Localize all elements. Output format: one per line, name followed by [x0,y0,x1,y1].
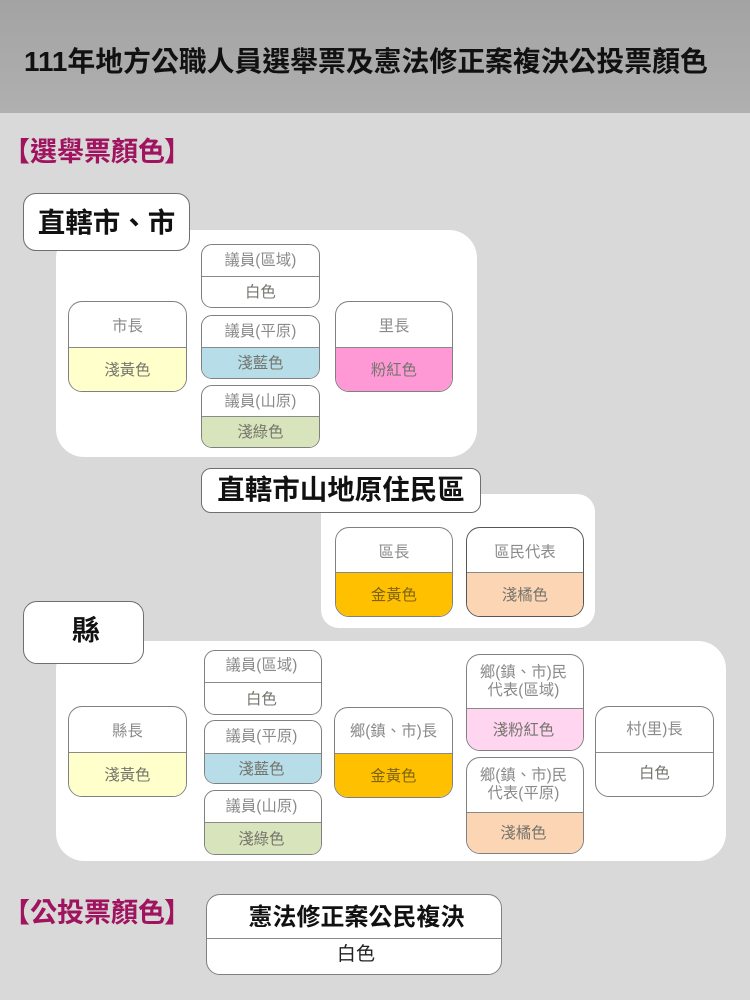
card: councilor district: 白色 [245,284,276,301]
card: village chief [595,706,714,797]
card: councilor district: 議員(區域) [224,252,296,268]
header band [0,0,750,113]
card: county magistrate: 縣長 [112,723,143,740]
card: township chief [334,707,453,798]
card: councilor mountain: 議員(山原) [224,392,296,410]
referendum name [207,895,501,939]
label: county: 縣 [72,615,100,646]
card: councilor district: 議員(區域) [226,656,297,674]
card: councilor district [201,244,320,308]
card: councilor plains [204,720,322,784]
card: mayor: 市長 [112,318,143,335]
card: township chief: 金黃色 [370,768,417,785]
label: municipalities and cities [23,193,190,251]
card: councilor district [204,650,322,715]
card: township representative district: 淺粉紅色 [493,722,554,738]
card: township representative plains: 鄉(鎮、市)民 [480,767,567,784]
card: district representative: 淺橘色 [502,587,548,604]
panel: municipalities and cities [56,230,477,457]
card: township representative plains: 淺橘色 [500,825,547,842]
card: councilor mountain: 淺綠色 [238,830,285,848]
card: constitutional amendment referendum [206,894,502,975]
card: councilor mountain [204,790,322,855]
card: councilor plains: 淺藍色 [237,355,284,372]
title: 111年地方公職人員選舉票及憲法修正案複決公投票顏色 [24,46,708,77]
card: county magistrate [68,706,187,797]
card: township representative district [466,654,584,751]
card: district representative [466,527,584,617]
card: township representative plains [466,757,584,854]
card: county magistrate: 淺黃色 [104,767,151,784]
card: district chief [335,527,453,617]
card: village chief: 村(里)長 [626,720,683,738]
referendum name: 憲法修正案公民複決 [249,904,464,930]
panel: indigenous districts [321,494,595,628]
card: councilor mountain [201,385,320,448]
panel: counties [56,641,726,861]
label: indigenous districts: 直轄市山地原住民區 [217,474,465,505]
card: township chief: 鄉(鎮、市)長 [350,722,437,740]
card: district representative: 區民代表 [494,544,556,561]
card: borough chief: 里長 [379,318,409,335]
heading: referendum ballot color: 【公投票顏色】 [3,898,191,928]
card: councilor district: 白色 [246,690,277,708]
card: councilor mountain: 淺綠色 [237,424,284,441]
card: township representative district: 鄉(鎮、市)民 [480,664,567,680]
label: county [23,601,144,664]
heading: ballot colors: 【選舉票顏色】 [3,137,191,167]
label: municipalities and cities: 直轄市、市 [38,207,175,238]
label: indigenous districts [201,468,481,513]
card: borough chief [335,301,453,392]
card: village chief: 白色 [639,765,670,782]
card: district chief: 金黃色 [371,587,417,604]
card: mayor [68,301,187,392]
card: borough chief: 粉紅色 [371,362,417,379]
card: district chief: 區長 [379,544,409,561]
card: councilor plains: 議員(平原) [224,322,296,340]
card: councilor plains: 淺藍色 [238,760,285,778]
card: councilor plains [201,315,320,379]
card: mayor: 淺黃色 [104,362,151,379]
card: councilor mountain: 議員(山原) [226,798,297,814]
card: township representative district: 代表(區域) [488,682,559,698]
referendum color value: 白色 [337,944,375,964]
card: councilor plains: 議員(平原) [226,728,297,745]
card: township representative plains: 代表(平原) [488,785,559,802]
